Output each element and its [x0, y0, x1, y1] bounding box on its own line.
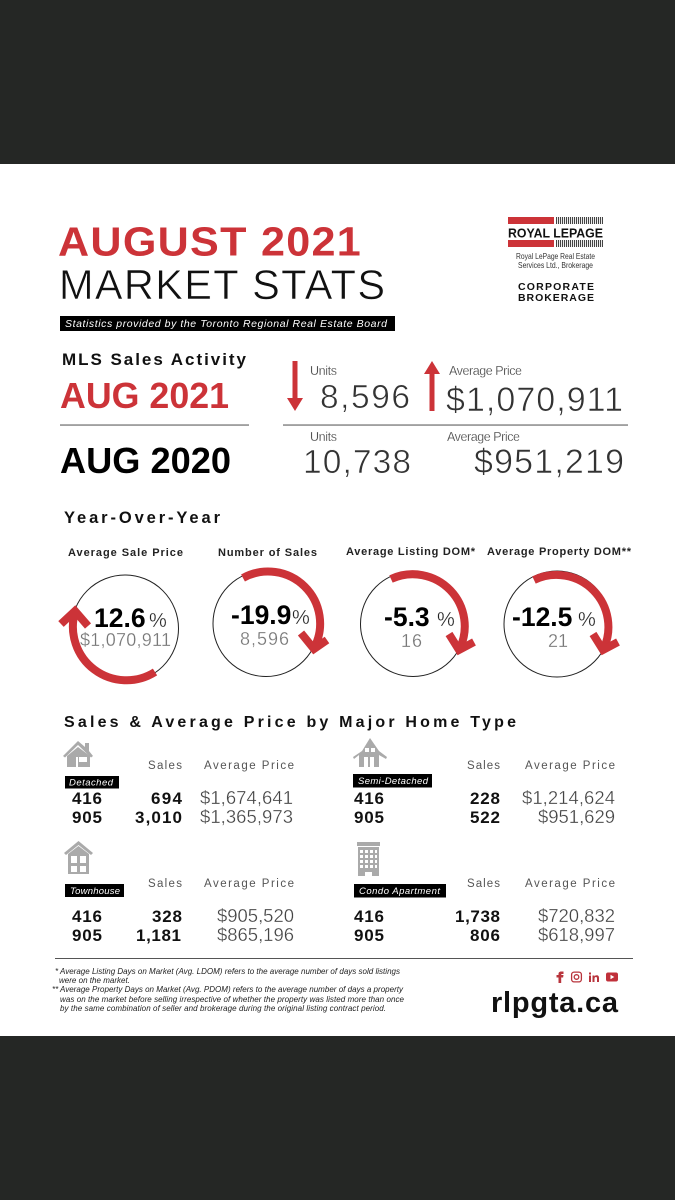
panel: condo apartment: 1,738 — [455, 907, 500, 926]
panel: condo apartment: $720,832 — [538, 905, 615, 926]
panel: semi-detached: Sales — [467, 760, 500, 772]
panel: semi-detached — [353, 738, 615, 827]
label: condo apartment: Condo Apartment — [359, 886, 440, 897]
icon: semi-detached house — [353, 738, 387, 767]
website url: rlpgta.ca — [491, 987, 619, 1019]
panel: semi-detached: 228 — [470, 789, 500, 808]
panel: detached: 694 — [151, 789, 183, 808]
arrow: units down — [287, 361, 303, 411]
heading: Year-Over-Year: Year-Over-Year — [64, 509, 221, 527]
panel: semi-detached: 522 — [470, 808, 500, 827]
panel: average listing DOM: -5.3 — [384, 602, 430, 632]
icon: instagram — [572, 972, 581, 982]
logo: Royal LePage — [508, 217, 603, 304]
title — [58, 218, 385, 308]
icon: condo building — [357, 842, 380, 876]
logo: Royal LePage: Royal LePage Real Estate — [516, 251, 595, 261]
panel: townhouse: Average Price — [204, 878, 294, 890]
source banner: Statistics provided by the Toronto Regional Real Estate Board — [65, 318, 388, 330]
label: detached: Detached — [69, 778, 114, 788]
arrow: price up — [424, 361, 440, 411]
label: Aug 2020: AUG 2020 — [60, 440, 231, 481]
panel: condo apartment: Average Price — [525, 878, 615, 890]
panel: detached: Sales — [148, 760, 182, 772]
panel: townhouse: $905,520 — [217, 905, 294, 926]
footnotes: were on the market. — [59, 976, 130, 985]
panel: semi-detached: Average Price — [525, 760, 615, 772]
panel: average sale price: $1,070,911 — [80, 630, 171, 650]
label: Aug 2021: AUG 2021 — [60, 375, 229, 416]
panel: detached: $1,674,641 — [200, 787, 293, 808]
footnotes: Average Property Days on Market (Avg. PDOM) refers to the average number of days a property — [59, 985, 404, 994]
panel: average property DOM: 21 — [548, 631, 568, 651]
panel: number of sales: 8,596 — [240, 629, 289, 649]
title: AUGUST 2021 — [58, 218, 362, 264]
stat: average price 2021: $1,070,911 — [446, 381, 623, 419]
panel: detached: 3,010 — [135, 808, 182, 827]
footnotes: by the same combination of seller and brokerage during the original listing contract period. — [60, 1004, 386, 1013]
white poster panel — [0, 164, 675, 1036]
panel: townhouse: 1,181 — [136, 926, 181, 945]
panel: townhouse: 905 — [72, 926, 102, 945]
panel: average property DOM — [487, 546, 632, 677]
panel: semi-detached: $951,629 — [538, 806, 615, 827]
icon: facebook — [556, 972, 564, 983]
panel: average listing DOM: 16 — [401, 631, 422, 651]
panel: condo apartment: Sales — [467, 878, 500, 890]
top dark band — [0, 0, 675, 164]
footnotes: * — [55, 967, 59, 976]
panel: average listing DOM: % — [437, 609, 455, 631]
title: MARKET STATS — [59, 261, 385, 308]
panel: condo apartment: 416 — [354, 907, 384, 926]
stat: units 2021: 8,596 — [320, 379, 410, 416]
text: average price label 2020: Average Price — [447, 430, 520, 444]
panel: townhouse: 328 — [152, 907, 182, 926]
panel: number of sales: -19.9 — [231, 600, 291, 630]
label: semi-detached: Semi-Detached — [358, 776, 429, 787]
panel: detached: 416 — [72, 789, 102, 808]
stat: units 2020: 10,738 — [303, 444, 411, 481]
label: townhouse: Townhouse — [70, 886, 120, 897]
panel: detached: 905 — [72, 808, 102, 827]
panel: townhouse: $865,196 — [217, 924, 294, 945]
text: average price label 2021: Average Price — [449, 364, 522, 378]
panel: townhouse: Sales — [148, 878, 182, 890]
bottom dark band — [0, 1036, 675, 1200]
heading: sales and price by home type: Sales & Average Price by Major Home Type — [64, 714, 516, 731]
panel: condo apartment: 806 — [470, 926, 500, 945]
panel: number of sales: % — [292, 607, 310, 629]
panel: average sale price: % — [149, 610, 167, 632]
stat: average price 2020: $951,219 — [474, 443, 624, 481]
text: units label 2020: Units — [310, 430, 337, 444]
panel: number of sales — [213, 547, 327, 676]
panel: townhouse — [64, 841, 294, 945]
panel: average property DOM: % — [578, 609, 596, 631]
footnotes: ** — [52, 985, 59, 994]
panel: detached — [63, 741, 294, 827]
footnotes: was on the market before selling irrespective of whether the property was listed more than once — [60, 995, 405, 1004]
logo: Royal LePage: ROYAL LEPAGE — [508, 226, 603, 240]
panel: average listing DOM: Average Listing DOM* — [346, 546, 476, 558]
logo: Royal LePage: Services Ltd., Brokerage — [518, 260, 593, 270]
panel: average sale price — [61, 547, 183, 682]
panel: average property DOM: -12.5 — [512, 602, 572, 632]
heading: MLS Sales Activity: MLS Sales Activity — [62, 350, 247, 369]
footnotes — [52, 967, 405, 1013]
logo: Royal LePage: CORPORATE — [518, 281, 594, 293]
panel: townhouse: 416 — [72, 907, 102, 926]
logo: Royal LePage: BROKERAGE — [518, 292, 594, 304]
panel: condo apartment: $618,997 — [538, 924, 615, 945]
icon: linkedin — [589, 972, 599, 982]
panel: number of sales: Number of Sales — [218, 547, 317, 559]
panel: average sale price: 12.6 — [94, 603, 146, 633]
panel: condo apartment — [354, 842, 615, 945]
icon: detached house — [63, 741, 93, 767]
panel: MLS sales activity — [60, 350, 624, 481]
panel: semi-detached: 416 — [354, 789, 384, 808]
panel: average property DOM: Average Property DOM** — [487, 546, 632, 558]
icon: youtube — [606, 972, 618, 982]
panel: detached: Average Price — [204, 760, 294, 772]
panel: condo apartment: 905 — [354, 926, 384, 945]
icon: townhouse — [64, 841, 93, 874]
panel: semi-detached: $1,214,624 — [522, 787, 615, 808]
panel: semi-detached: 905 — [354, 808, 384, 827]
panel: average sale price: Average Sale Price — [68, 547, 183, 559]
text: units label 2021: Units — [310, 364, 337, 378]
panel: detached: $1,365,973 — [200, 806, 293, 827]
footnotes: Average Listing Days on Market (Avg. LDOM) refers to the average number of days sold listings — [59, 967, 400, 976]
panel: average listing DOM — [346, 546, 476, 676]
icons: social media — [556, 972, 618, 983]
